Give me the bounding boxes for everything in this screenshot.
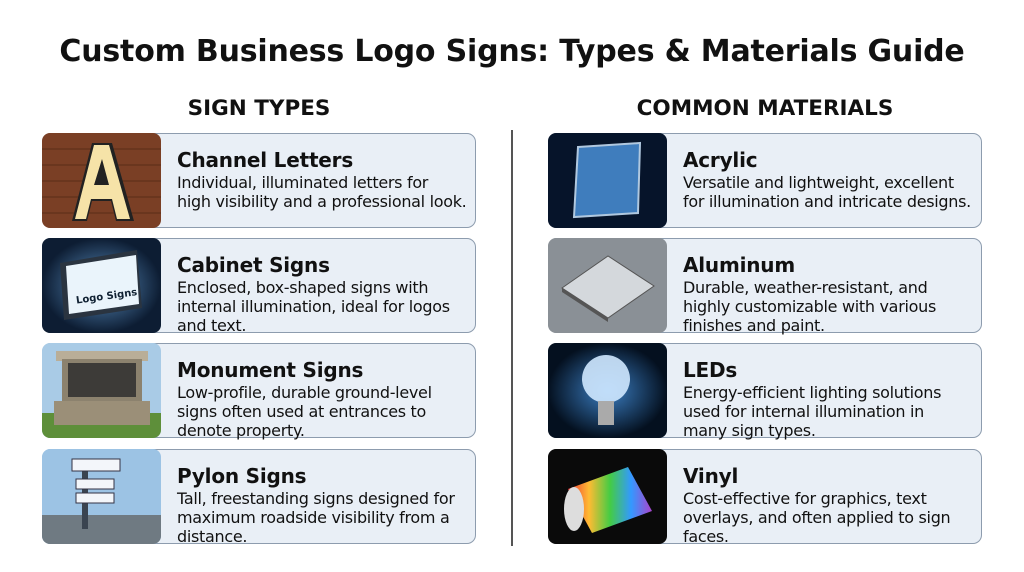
panel: leds: used for internal illumination in — [683, 402, 924, 421]
panel: aluminum: Aluminum — [683, 253, 795, 277]
panel: cabinet signs: internal illumination, ideal for logos — [177, 297, 450, 316]
panel: acrylic: Acrylic — [683, 148, 757, 172]
panel: pylon signs — [42, 449, 476, 544]
panel: monument signs: denote property. — [177, 421, 305, 440]
icon: aluminum plate — [548, 238, 667, 333]
panel: channel letters: Channel Letters — [177, 148, 353, 172]
panel: monument signs: Low-profile, durable ground-level — [177, 383, 432, 402]
panel: cabinet signs — [42, 238, 476, 333]
panel: cabinet signs: Cabinet Signs — [177, 253, 330, 277]
panel: acrylic: Versatile and lightweight, excellent — [683, 173, 954, 192]
panel: channel letters — [42, 133, 476, 228]
panel: pylon signs: Pylon Signs — [177, 464, 306, 488]
panel: aluminum: highly customizable with various — [683, 297, 936, 316]
panel: cabinet signs: and text. — [177, 316, 246, 335]
panel: channel letters: high visibility and a professional look. — [177, 192, 466, 211]
panel: acrylic — [548, 133, 982, 228]
icon: pylon sign — [42, 449, 161, 544]
panel: leds: Energy-efficient lighting solutions — [683, 383, 941, 402]
panel: vinyl: Vinyl — [683, 464, 738, 488]
panel: monument signs: signs often used at entrances to — [177, 402, 426, 421]
icon: led bulb — [548, 343, 667, 438]
heading: common materials: COMMON MATERIALS — [637, 96, 893, 121]
panel: vinyl: overlays, and often applied to sign — [683, 508, 950, 527]
panel: leds: LEDs — [683, 358, 737, 382]
panel: aluminum — [548, 238, 982, 333]
panel: cabinet signs: Enclosed, box-shaped signs with — [177, 278, 428, 297]
panel: aluminum: Durable, weather-resistant, and — [683, 278, 927, 297]
icon: cabinet sign box — [42, 238, 161, 333]
panel: monument signs: Monument Signs — [177, 358, 363, 382]
panel: acrylic: for illumination and intricate designs. — [683, 192, 971, 211]
panel: pylon signs: distance. — [177, 527, 247, 546]
icon: vinyl roll — [548, 449, 667, 544]
panel: leds: many sign types. — [683, 421, 816, 440]
panel: vinyl: Cost-effective for graphics, text — [683, 489, 927, 508]
heading: sign types: SIGN TYPES — [188, 96, 330, 121]
panel: vinyl: faces. — [683, 527, 729, 546]
panel: pylon signs: Tall, freestanding signs designed for — [177, 489, 455, 508]
panel: monument signs — [42, 343, 476, 438]
panel: channel letters: Individual, illuminated letters for — [177, 173, 428, 192]
icon: monument sign — [42, 343, 161, 438]
icon: acrylic sheet — [548, 133, 667, 228]
title: Custom Business Logo Signs: Types & Materials Guide — [59, 34, 965, 69]
panel: aluminum: finishes and paint. — [683, 316, 825, 335]
panel: leds — [548, 343, 982, 438]
panel: pylon signs: maximum roadside visibility from a — [177, 508, 450, 527]
icon: cabinet sign box: Logo Signs — [75, 287, 138, 307]
panel: vinyl — [548, 449, 982, 544]
icon: channel letter A on brick — [42, 133, 161, 228]
